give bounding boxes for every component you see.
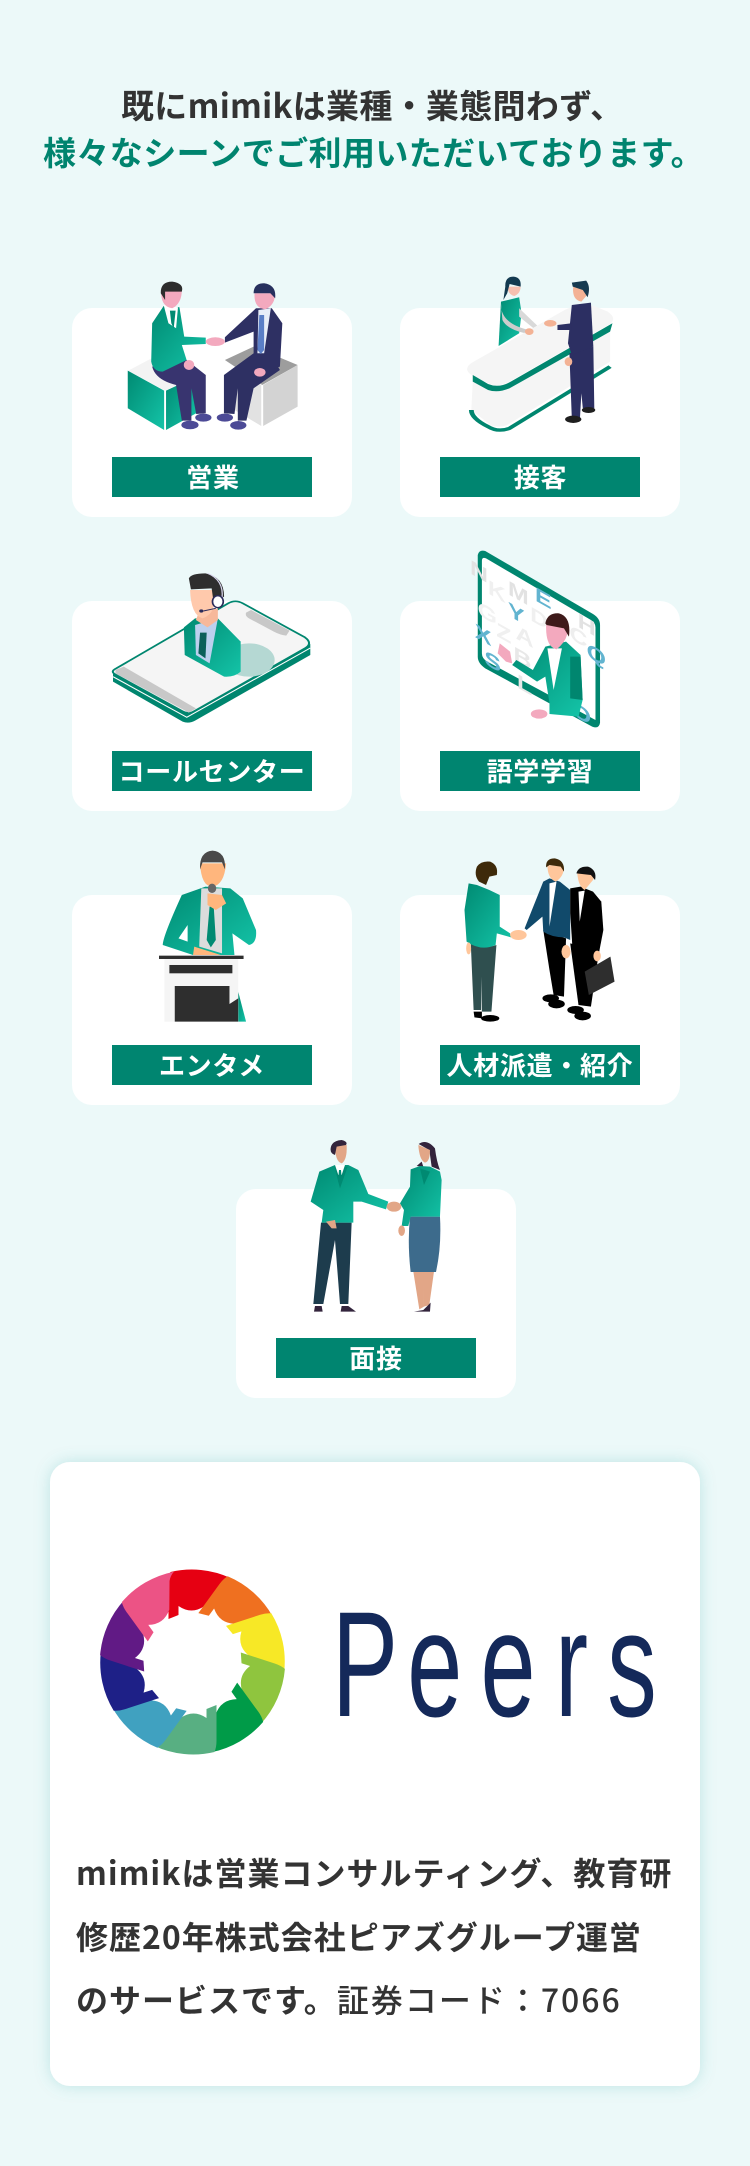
icon: teacher and letter screen: D [530, 603, 548, 635]
icon: teacher and letter screen: E [535, 583, 552, 615]
icon: teacher and letter screen: K [488, 576, 506, 608]
label [112, 1045, 312, 1085]
title: 既にmimikは業種・業態問わず、 [121, 80, 623, 128]
panel: language learning [400, 551, 680, 811]
label [276, 1338, 476, 1378]
panel: company info [50, 1462, 700, 2086]
title [43, 80, 704, 175]
label: エンタメ [159, 1046, 265, 1083]
icon: teacher and letter screen: Y [508, 598, 525, 630]
label [440, 751, 640, 791]
label [440, 457, 640, 497]
icon: man and woman shaking hands [311, 1140, 442, 1312]
title: 様々なシーンでご利用いただいております。 [43, 127, 704, 175]
icon: teacher and letter screen: X [475, 620, 492, 652]
icon: teacher and letter screen: O [572, 697, 591, 730]
label: 接客 [514, 458, 567, 495]
icon: teacher and letter screen: C [570, 621, 588, 653]
icon: teacher and letter screen: S [484, 647, 501, 678]
description text: mimikは営業コンサルティング、教育研 [76, 1849, 672, 1895]
icon: teacher and letter screen: M [508, 577, 529, 611]
panel: customer service [400, 277, 680, 517]
icon: speaker at podium [159, 851, 256, 1022]
icon: two people shaking hands on cubes [128, 282, 298, 430]
label: 語学学習 [487, 752, 593, 789]
panel: call center [72, 573, 352, 811]
panel: staffing [400, 858, 680, 1105]
description text [76, 1849, 672, 2022]
icon: teacher and letter screen: Z [496, 619, 511, 649]
panel: entertainment [72, 851, 352, 1105]
icon: Peers ring logo [93, 1565, 292, 1759]
icon: teacher and letter screen: G [478, 598, 497, 630]
label [112, 457, 312, 497]
icon: teacher and letter screen: H [578, 610, 596, 642]
label: 人材派遣・紹介 [447, 1046, 633, 1083]
panel: interview [236, 1140, 516, 1398]
panel: sales [72, 282, 352, 517]
description text: のサービスです。証券コード：7066 [76, 1976, 622, 2022]
icon: teacher and letter screen: A [516, 621, 534, 653]
icon: reception counter [467, 277, 613, 430]
description text: 修歴20年株式会社ピアズグループ運営 [76, 1913, 642, 1959]
icon: teacher and letter screen [470, 551, 606, 730]
label: コールセンター [119, 752, 305, 789]
icon: three business people [464, 858, 615, 1022]
icon: teacher and letter screen: Q [587, 639, 606, 672]
label: 面接 [349, 1339, 403, 1376]
icon: teacher and letter screen: N [470, 556, 488, 588]
icon: operator in smartphone [113, 573, 310, 723]
icon: teacher and letter screen: L [517, 670, 532, 701]
logo wordmark: Peers [332, 1580, 657, 1748]
label: 営業 [186, 458, 240, 495]
icon: teacher and letter screen: B [514, 643, 532, 675]
